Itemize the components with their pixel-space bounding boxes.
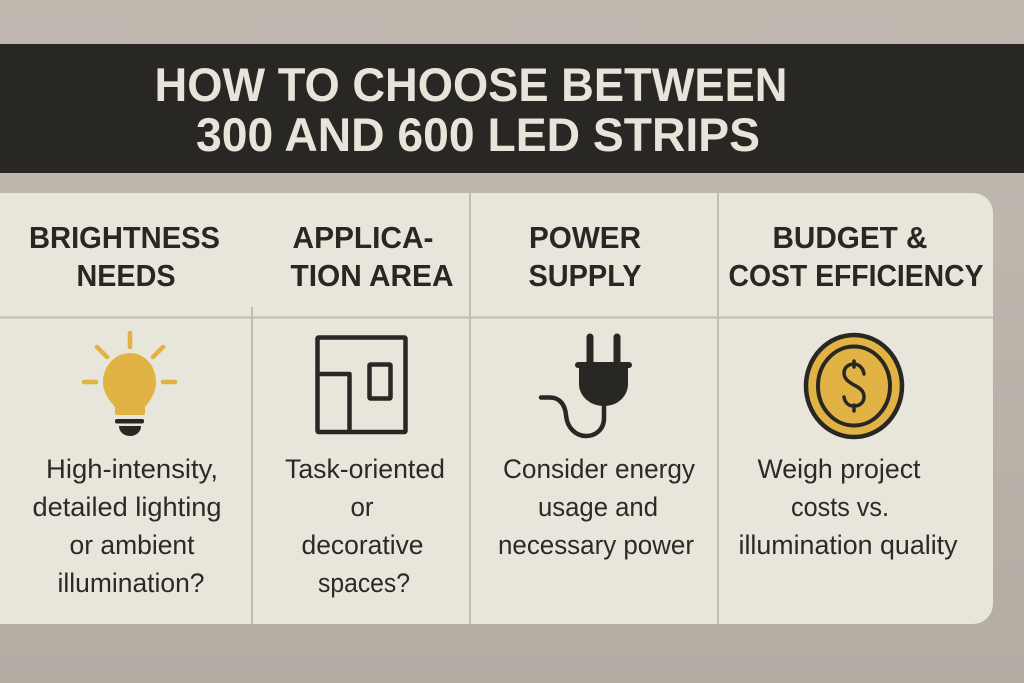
heading: application area: TION AREA xyxy=(290,258,454,293)
text: budget description: costs vs. xyxy=(791,492,889,522)
heading: power supply: SUPPLY xyxy=(528,258,642,293)
column: power supply xyxy=(498,220,695,560)
icon: power plug xyxy=(541,337,632,436)
text: power description: necessary power xyxy=(498,530,694,560)
heading: application area xyxy=(290,220,454,293)
text: budget description xyxy=(738,454,958,560)
heading: budget and cost efficiency xyxy=(728,220,984,293)
title: 300 AND 600 LED STRIPS xyxy=(196,108,760,161)
column: budget and cost efficiency xyxy=(728,220,984,560)
heading: brightness needs xyxy=(29,220,220,293)
text: brightness description: or ambient xyxy=(70,530,195,560)
text: brightness description: detailed lighting xyxy=(32,492,222,522)
column: brightness needs xyxy=(29,220,222,598)
heading: brightness needs: BRIGHTNESS xyxy=(29,220,220,255)
text: application description xyxy=(285,454,445,598)
text: budget description: illumination quality xyxy=(738,530,958,560)
text: application description: spaces? xyxy=(318,568,410,598)
heading: power supply xyxy=(528,220,642,293)
text: budget description: Weigh project xyxy=(758,454,921,484)
heading: power supply: POWER xyxy=(529,220,641,255)
text: brightness description xyxy=(32,454,222,598)
text: power description: Consider energy xyxy=(503,454,695,484)
heading: brightness needs: NEEDS xyxy=(76,258,176,293)
icon: dollar coin xyxy=(806,335,902,437)
heading: budget and cost efficiency: COST EFFICIENCY xyxy=(728,258,984,293)
title xyxy=(154,58,788,161)
heading: application area: APPLICA- xyxy=(292,220,434,255)
text: application description: decorative xyxy=(302,530,424,560)
icon: light bulb xyxy=(84,333,175,436)
title: HOW TO CHOOSE BETWEEN xyxy=(154,58,788,111)
heading: budget and cost efficiency: BUDGET & xyxy=(772,220,928,255)
icon: floor plan xyxy=(318,338,406,432)
panel: comparison table xyxy=(0,193,993,624)
column: application area xyxy=(285,220,454,598)
text: application description: or xyxy=(350,492,374,522)
text: brightness description: illumination? xyxy=(58,568,204,598)
text: power description: usage and xyxy=(538,492,658,522)
text: power description xyxy=(498,454,695,560)
text: application description: Task-oriented xyxy=(285,454,445,484)
title banner xyxy=(0,44,1024,173)
text: brightness description: High-intensity, xyxy=(46,454,218,484)
